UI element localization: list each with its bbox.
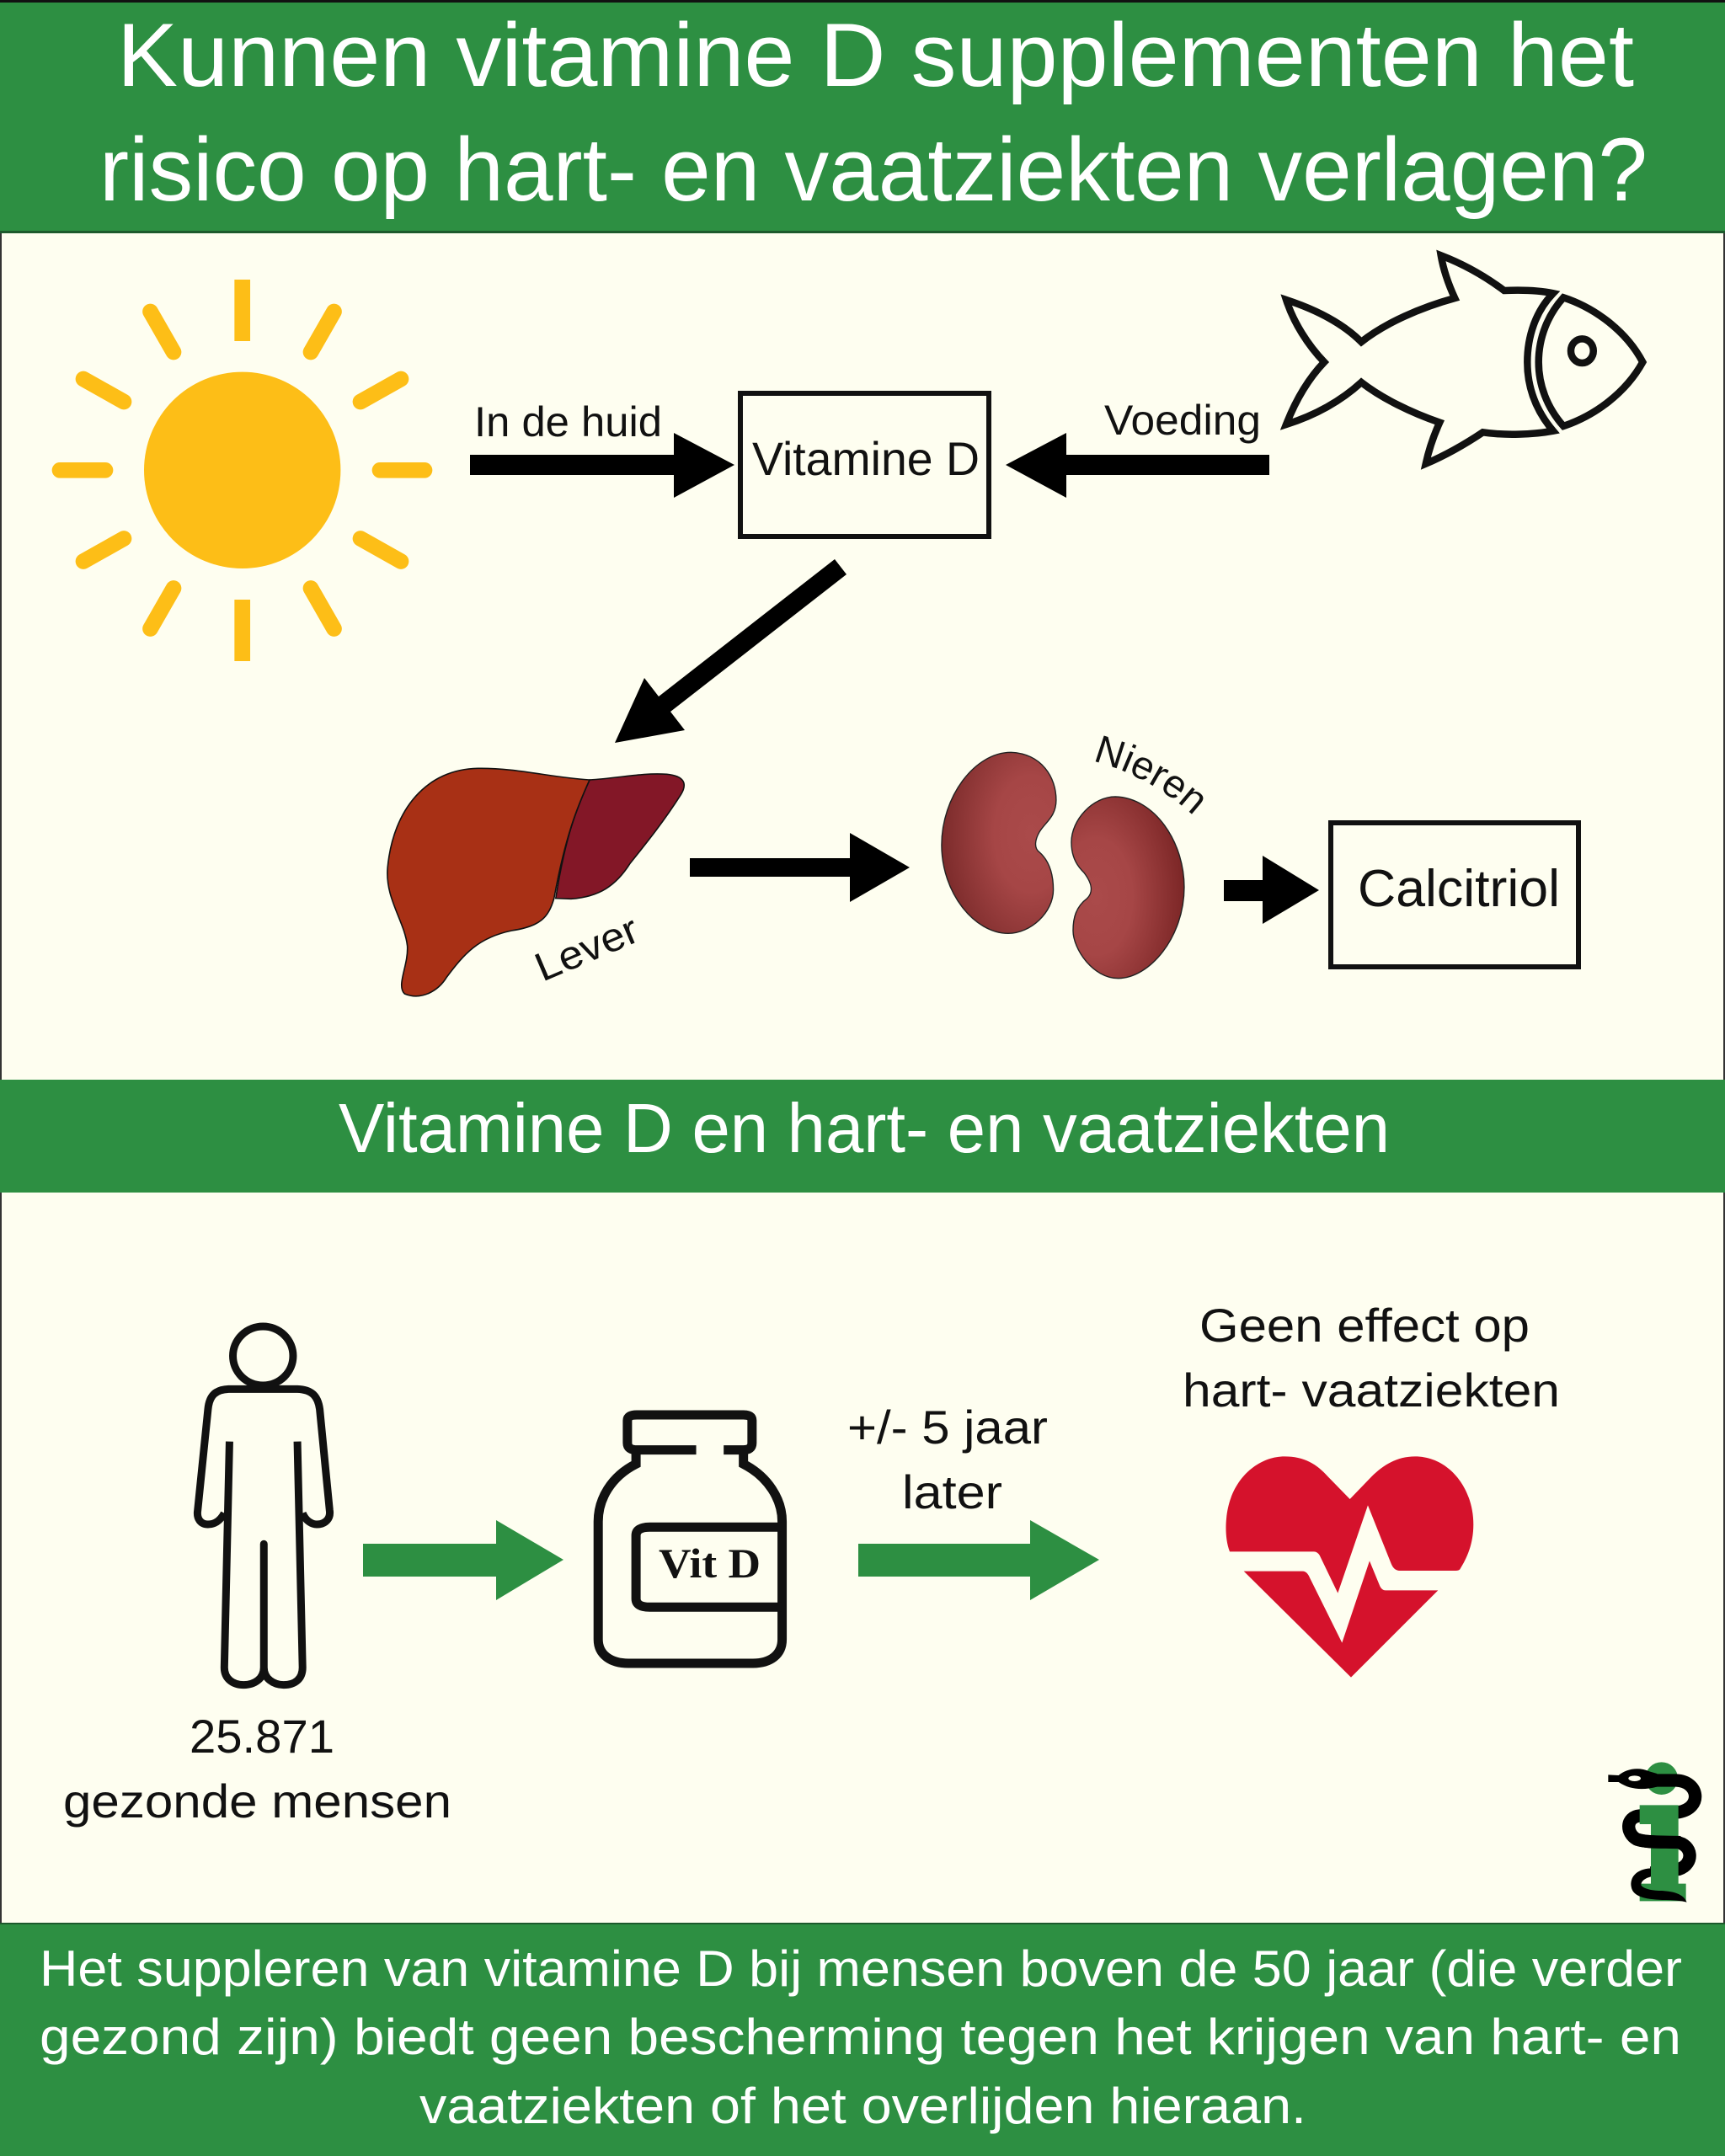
icon: liver — [387, 768, 684, 996]
icon: sun — [60, 280, 425, 661]
arrow: vitamine D to liver — [615, 559, 846, 743]
icon: person — [197, 1326, 330, 1685]
label: in de huid: In de huid — [474, 398, 662, 446]
icon: kidneys — [942, 752, 1184, 979]
icon: fish — [1286, 255, 1642, 464]
box: vitamine D: Vitamine D — [752, 432, 980, 485]
label: lever: Lever — [529, 907, 645, 990]
label: duration — [847, 1401, 1048, 1518]
arrow: supplement to outcome — [858, 1520, 1099, 1600]
icon: logo serpent and letter i — [1608, 1762, 1696, 1903]
label: voeding: Voeding — [1104, 397, 1261, 444]
label: nieren: Nieren — [1090, 726, 1217, 822]
icon: vitamin D bottle — [598, 1415, 782, 1663]
box: calcitriol — [1331, 823, 1578, 967]
arrow: liver to kidneys — [690, 833, 910, 902]
box: calcitriol: Calcitriol — [1358, 860, 1560, 918]
label: outcome — [1183, 1299, 1560, 1417]
label: outcome: Geen effect op — [1199, 1299, 1530, 1352]
title banner: risico op hart- en vaatziekten verlagen? — [99, 119, 1648, 220]
title banner — [0, 0, 1725, 233]
arrow: sun to vitamine D — [470, 433, 734, 498]
label: number of people: 25.871 — [190, 1710, 334, 1763]
label: number of people — [63, 1710, 451, 1828]
section heading banner: Vitamine D en hart- en vaatziekten — [339, 1089, 1390, 1167]
conclusion banner: gezond zijn) biedt geen bescherming tegen het krijgen van hart- en — [40, 2009, 1681, 2065]
arrow: person to supplement — [363, 1520, 563, 1600]
label: outcome: hart- vaatziekten — [1183, 1364, 1560, 1417]
conclusion banner — [0, 1923, 1725, 2156]
icon: vitamin D bottle: Vit D — [659, 1540, 761, 1587]
label: duration: later — [902, 1465, 1002, 1518]
label: number of people: gezonde mensen — [63, 1774, 451, 1828]
arrow: fish to vitamine D — [1006, 433, 1269, 498]
section heading banner — [0, 1080, 1725, 1193]
icon: heart with pulse — [1226, 1456, 1473, 1678]
label: duration: +/- 5 jaar — [847, 1401, 1048, 1454]
box: vitamine D — [740, 393, 989, 536]
arrow: kidneys to calcitriol — [1224, 856, 1319, 924]
conclusion banner: Het suppleren van vitamine D bij mensen boven de 50 jaar (die verder — [40, 1940, 1682, 1997]
conclusion banner: vaatziekten of het overlijden hieraan. — [419, 2078, 1306, 2134]
title banner: Kunnen vitamine D supplementen het — [117, 4, 1634, 105]
